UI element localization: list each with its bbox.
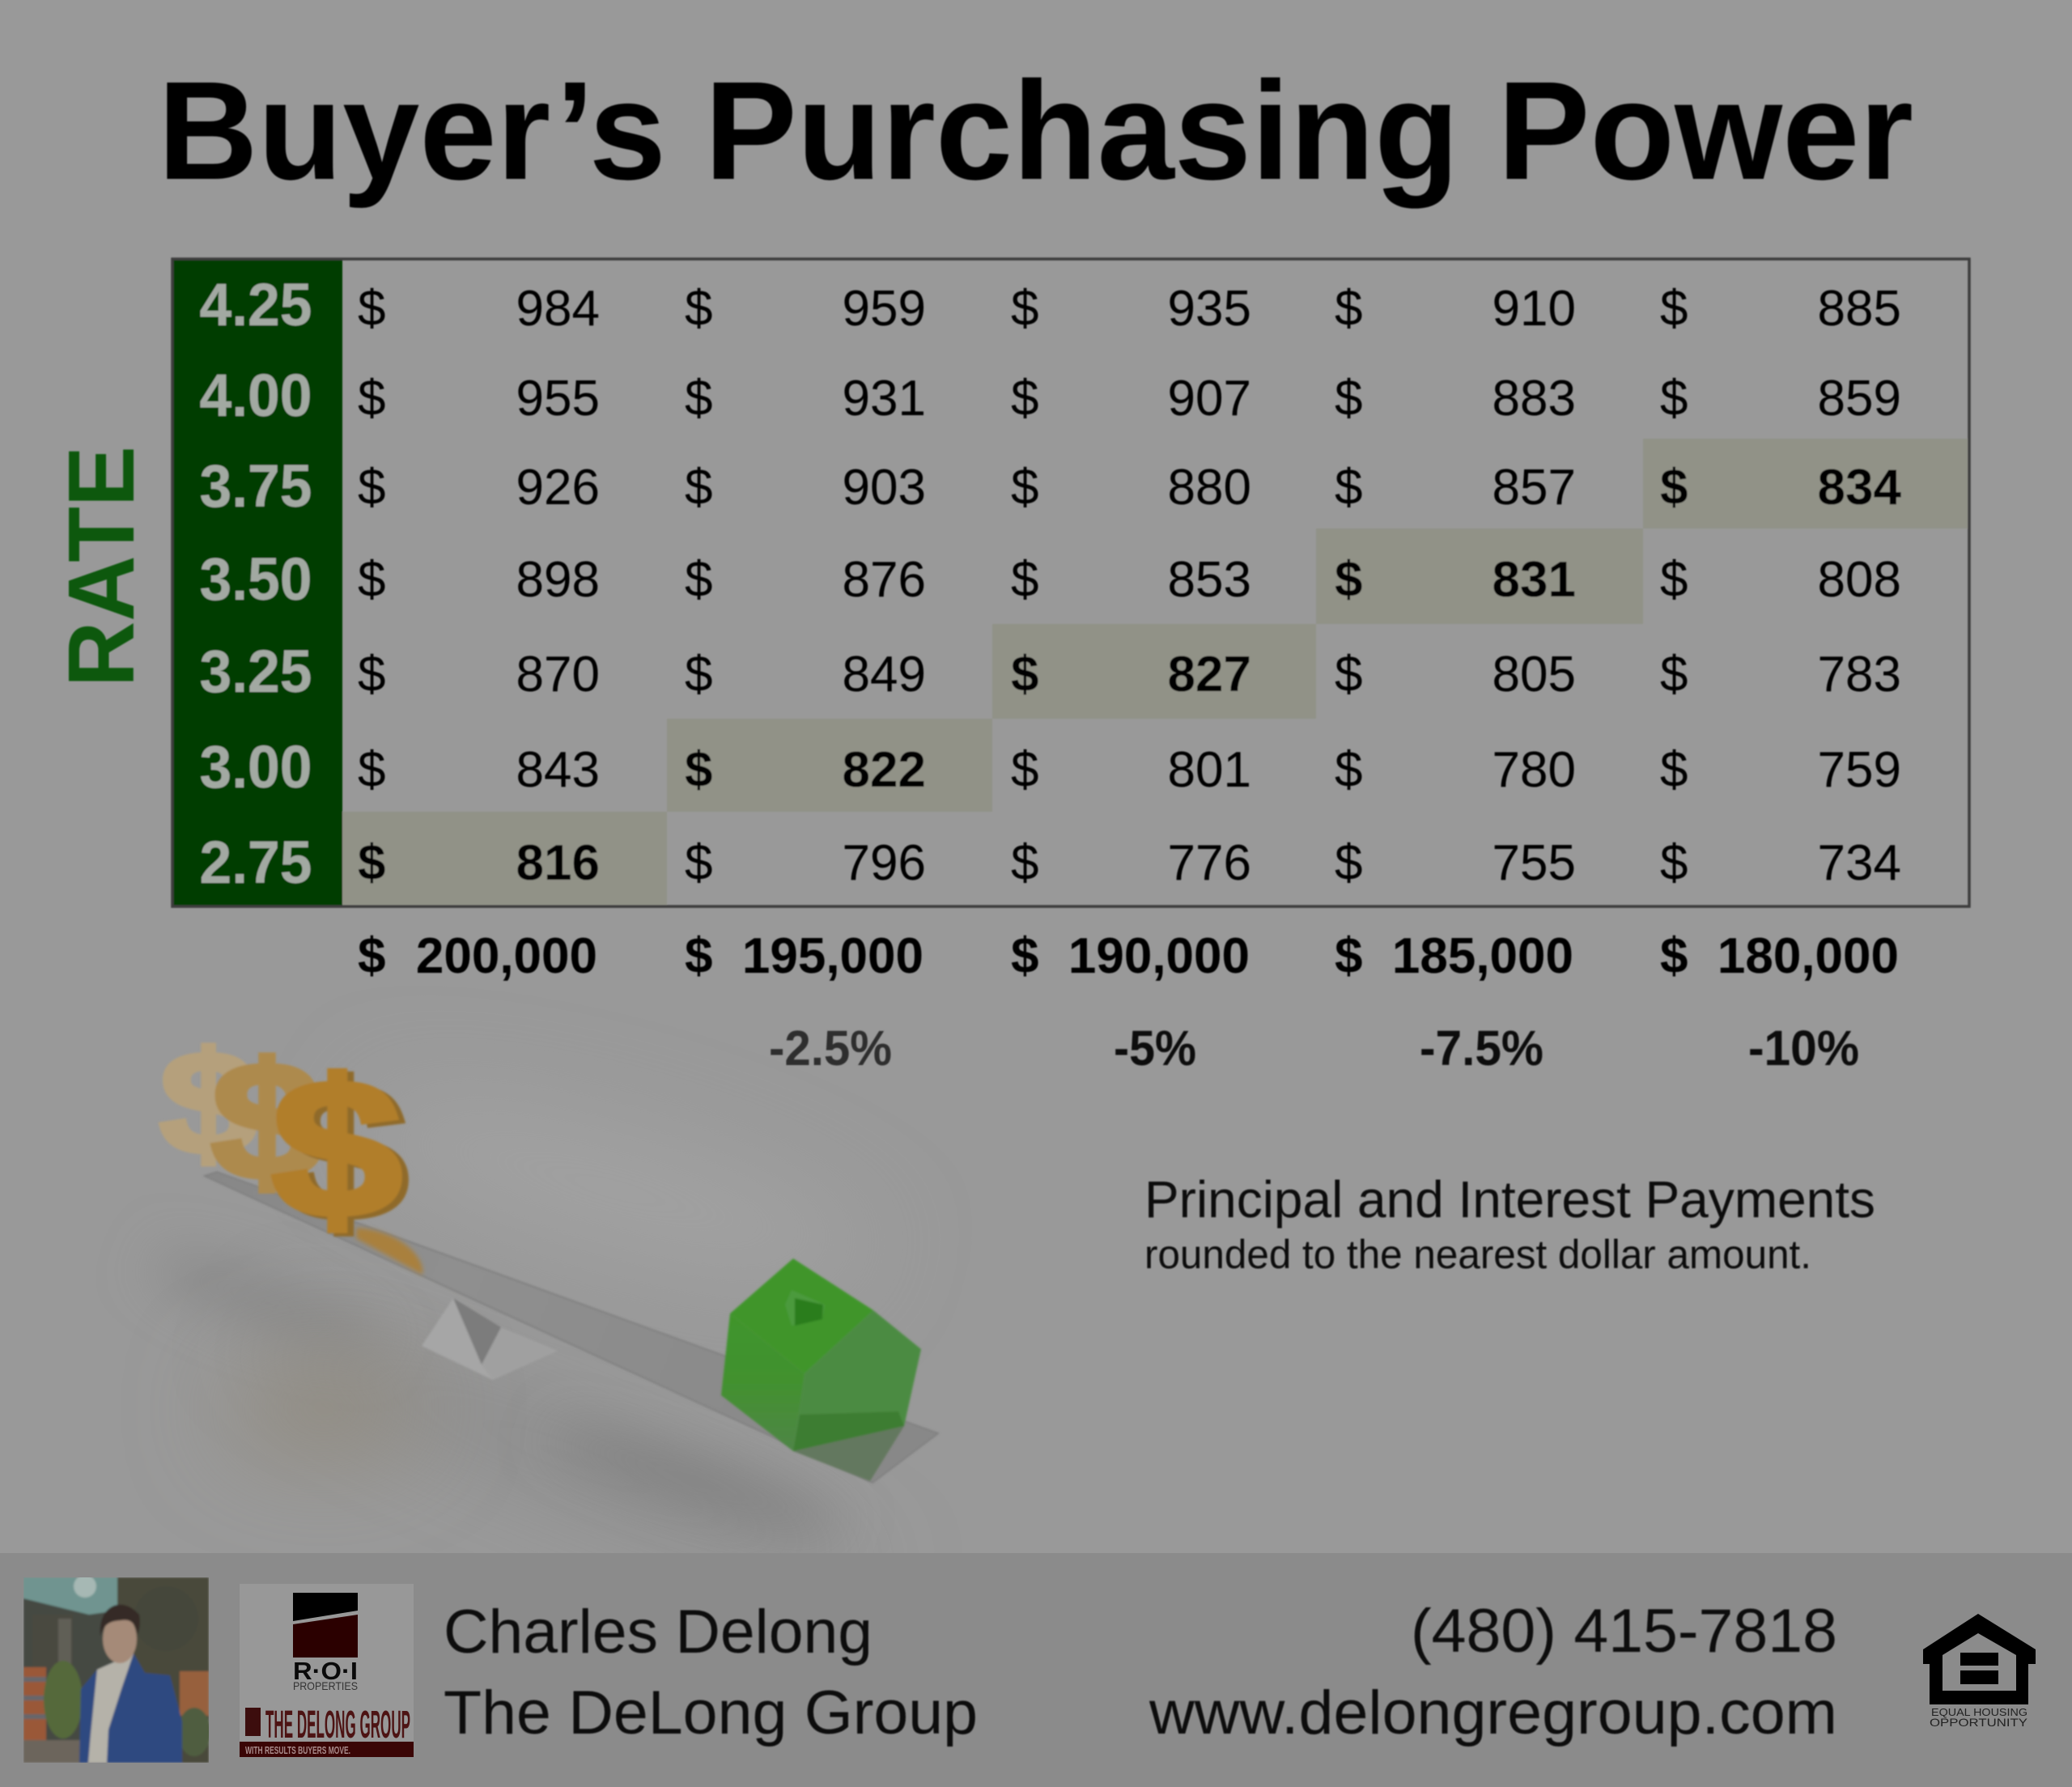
axis label: RATE: RATE <box>49 446 154 687</box>
percentage reductions: -2.5% <box>769 1021 892 1076</box>
row: 2.75: 734 <box>1818 835 1901 891</box>
row: 2.75: $ <box>1335 835 1362 891</box>
icon: equal housing opportunity: OPPORTUNITY <box>1930 1716 2028 1729</box>
row: 4.00: $ <box>1335 371 1362 427</box>
icon: equal housing opportunity <box>1923 1614 2036 1729</box>
row: 3.50 <box>199 545 1901 613</box>
row: 3.00: $ <box>1011 742 1038 798</box>
row: 3.25: 827 <box>1168 647 1251 702</box>
icon: gold dollar signs: $ <box>159 1022 257 1185</box>
rate column background <box>172 259 342 906</box>
row: 3.75: 880 <box>1168 460 1251 516</box>
row: 4.25: 984 <box>516 281 600 337</box>
row: 4.25: $ <box>1011 281 1038 337</box>
note: payments <box>1144 1170 1875 1277</box>
row: 4.25 <box>199 271 1901 338</box>
row: 3.75: $ <box>1660 460 1688 516</box>
row: 2.75 <box>199 829 1901 896</box>
row: 3.75: $ <box>1011 460 1038 516</box>
row: 3.25: $ <box>1011 647 1038 702</box>
row: 2.75: 2.75 <box>199 829 312 896</box>
row: 3.00: $ <box>685 742 712 798</box>
row: 4.00: $ <box>358 371 385 427</box>
row: 3.50: $ <box>358 552 385 608</box>
row: 3.50: $ <box>685 552 712 608</box>
row: 3.00: 3.00 <box>199 733 312 800</box>
seesaw beam <box>205 1172 938 1483</box>
footer bar: THE DELONG GROUP <box>265 1704 410 1747</box>
row: 4.00 <box>199 362 1901 429</box>
home price row: $ <box>1335 928 1362 984</box>
row: 4.25: $ <box>685 281 712 337</box>
percentage reductions: -7.5% <box>1420 1021 1543 1076</box>
row: 3.50: 853 <box>1168 552 1251 608</box>
row: 2.75: 816 <box>516 835 600 891</box>
row: 3.00: $ <box>1335 742 1362 798</box>
row: 4.25: $ <box>358 281 385 337</box>
percentage reductions: -5% <box>1114 1021 1196 1076</box>
row: 3.25: 805 <box>1492 647 1576 702</box>
row: 2.75: $ <box>685 835 712 891</box>
payment table <box>172 259 1969 906</box>
home price row: $ <box>1011 928 1038 984</box>
row: 3.00 <box>199 733 1901 800</box>
agent name <box>444 1598 978 1747</box>
row: 3.25: 3.25 <box>199 638 312 705</box>
row: 3.75: $ <box>358 460 385 516</box>
row: 3.25: $ <box>685 647 712 702</box>
icon: gold dollar signs <box>159 1022 408 1261</box>
icon: gold dollar signs: $ <box>211 1028 322 1213</box>
home price row: 180,000 <box>1717 928 1899 984</box>
row: 3.50: $ <box>1660 552 1688 608</box>
row: 4.25: $ <box>1335 281 1362 337</box>
agent photo <box>23 1575 210 1763</box>
row: 4.25: 4.25 <box>199 271 312 338</box>
row: 3.75 <box>199 452 1902 520</box>
row: 3.00: $ <box>1660 742 1688 798</box>
row: 3.50: $ <box>1011 552 1038 608</box>
note: payments: Principal and Interest Payments <box>1144 1170 1875 1229</box>
row: 3.00: 843 <box>516 742 600 798</box>
home price row: $ <box>685 928 712 984</box>
footer bar <box>0 1553 2072 1787</box>
icon: equal housing opportunity: EQUAL HOUSING <box>1931 1706 2027 1718</box>
row: 2.75: $ <box>1660 835 1688 891</box>
row: 3.50: 808 <box>1818 552 1901 608</box>
row: 4.00: $ <box>685 371 712 427</box>
row: 4.00: 4.00 <box>199 362 312 429</box>
row: 4.00: $ <box>1660 371 1688 427</box>
highlighted diagonal cells <box>342 439 1968 905</box>
illustration: seesaw with dollars and house <box>145 1022 938 1598</box>
row: 2.75: $ <box>1011 835 1038 891</box>
home price row: $ <box>1660 928 1688 984</box>
row: 3.75: $ <box>685 460 712 516</box>
row: 3.00: 822 <box>843 742 926 798</box>
percentage reductions <box>769 1021 1859 1076</box>
contact details: www.delongregroup.com <box>1149 1679 1837 1747</box>
row: 3.25: 849 <box>843 647 926 702</box>
row: 3.75: 3.75 <box>199 452 312 520</box>
row: 2.75: $ <box>358 835 385 891</box>
row: 3.25: $ <box>1660 647 1688 702</box>
home price row: 200,000 <box>416 928 597 984</box>
row: 3.75: 834 <box>1818 460 1902 516</box>
row: 3.25 <box>199 638 1901 705</box>
row: 3.50: 898 <box>516 552 600 608</box>
home price row: 190,000 <box>1068 928 1250 984</box>
row: 3.25: 870 <box>516 647 600 702</box>
agent name: The DeLong Group <box>444 1679 978 1747</box>
row: 2.75: 796 <box>843 835 926 891</box>
row: 4.25: 935 <box>1168 281 1251 337</box>
row: 3.75: 926 <box>516 460 600 516</box>
row: 3.75: $ <box>1335 460 1362 516</box>
row: 4.00: 859 <box>1818 371 1901 427</box>
icon: gold dollar signs: $ <box>278 1044 408 1261</box>
title: Buyer’s Purchasing Power <box>158 52 1913 209</box>
row: 3.00: 801 <box>1168 742 1251 798</box>
agent name: Charles Delong <box>444 1598 873 1666</box>
contact details: (480) 415-7818 <box>1411 1597 1837 1666</box>
row: 4.25: $ <box>1660 281 1688 337</box>
note: payments: rounded to the nearest dollar amount. <box>1144 1232 1811 1277</box>
row: 3.50: 3.50 <box>199 545 312 613</box>
row: 3.00: $ <box>358 742 385 798</box>
row: 4.25: 885 <box>1818 281 1901 337</box>
percentage reductions: -10% <box>1748 1021 1859 1076</box>
row: 4.25: 959 <box>843 281 926 337</box>
row: 2.75: 755 <box>1492 835 1576 891</box>
row: 3.75: 857 <box>1492 460 1576 516</box>
row: 3.00: 759 <box>1818 742 1901 798</box>
row: 3.25: $ <box>358 647 385 702</box>
fulcrum <box>422 1298 558 1380</box>
logo: R.O.I Properties / The DeLong Group: PROPERTIES <box>293 1679 358 1692</box>
row: 3.50: $ <box>1335 552 1362 608</box>
icon: gold dollar signs: $ <box>272 1041 401 1258</box>
row: 3.25: 783 <box>1818 647 1901 702</box>
row: 3.00: 780 <box>1492 742 1576 798</box>
home price row: 195,000 <box>742 928 923 984</box>
logo: R.O.I Properties / The DeLong Group <box>240 1584 414 1757</box>
row: 4.00: $ <box>1011 371 1038 427</box>
logo: R.O.I Properties / The DeLong Group: R·O·I <box>293 1657 358 1685</box>
home price row: 185,000 <box>1392 928 1573 984</box>
row: 4.00: 907 <box>1168 371 1251 427</box>
dollar sign reflection <box>356 1228 422 1275</box>
row: 4.00: 931 <box>843 371 926 427</box>
table frame <box>172 259 1969 906</box>
row: 3.25: $ <box>1335 647 1362 702</box>
home price row: $ <box>358 928 385 984</box>
row: 4.00: 883 <box>1492 371 1576 427</box>
home price row <box>358 928 1899 984</box>
row: 4.25: 910 <box>1492 281 1576 337</box>
row: 4.00: 955 <box>516 371 600 427</box>
icon: green house <box>721 1259 921 1481</box>
row: 2.75: 776 <box>1168 835 1251 891</box>
row: 3.50: 831 <box>1492 552 1576 608</box>
row: 3.50: 876 <box>843 552 926 608</box>
logo: R.O.I Properties / The DeLong Group: WITH RESULTS BUYERS MOVE. <box>245 1744 350 1756</box>
row: 3.75: 903 <box>843 460 926 516</box>
soft background shading <box>145 1068 880 1598</box>
contact details <box>1149 1597 1837 1747</box>
